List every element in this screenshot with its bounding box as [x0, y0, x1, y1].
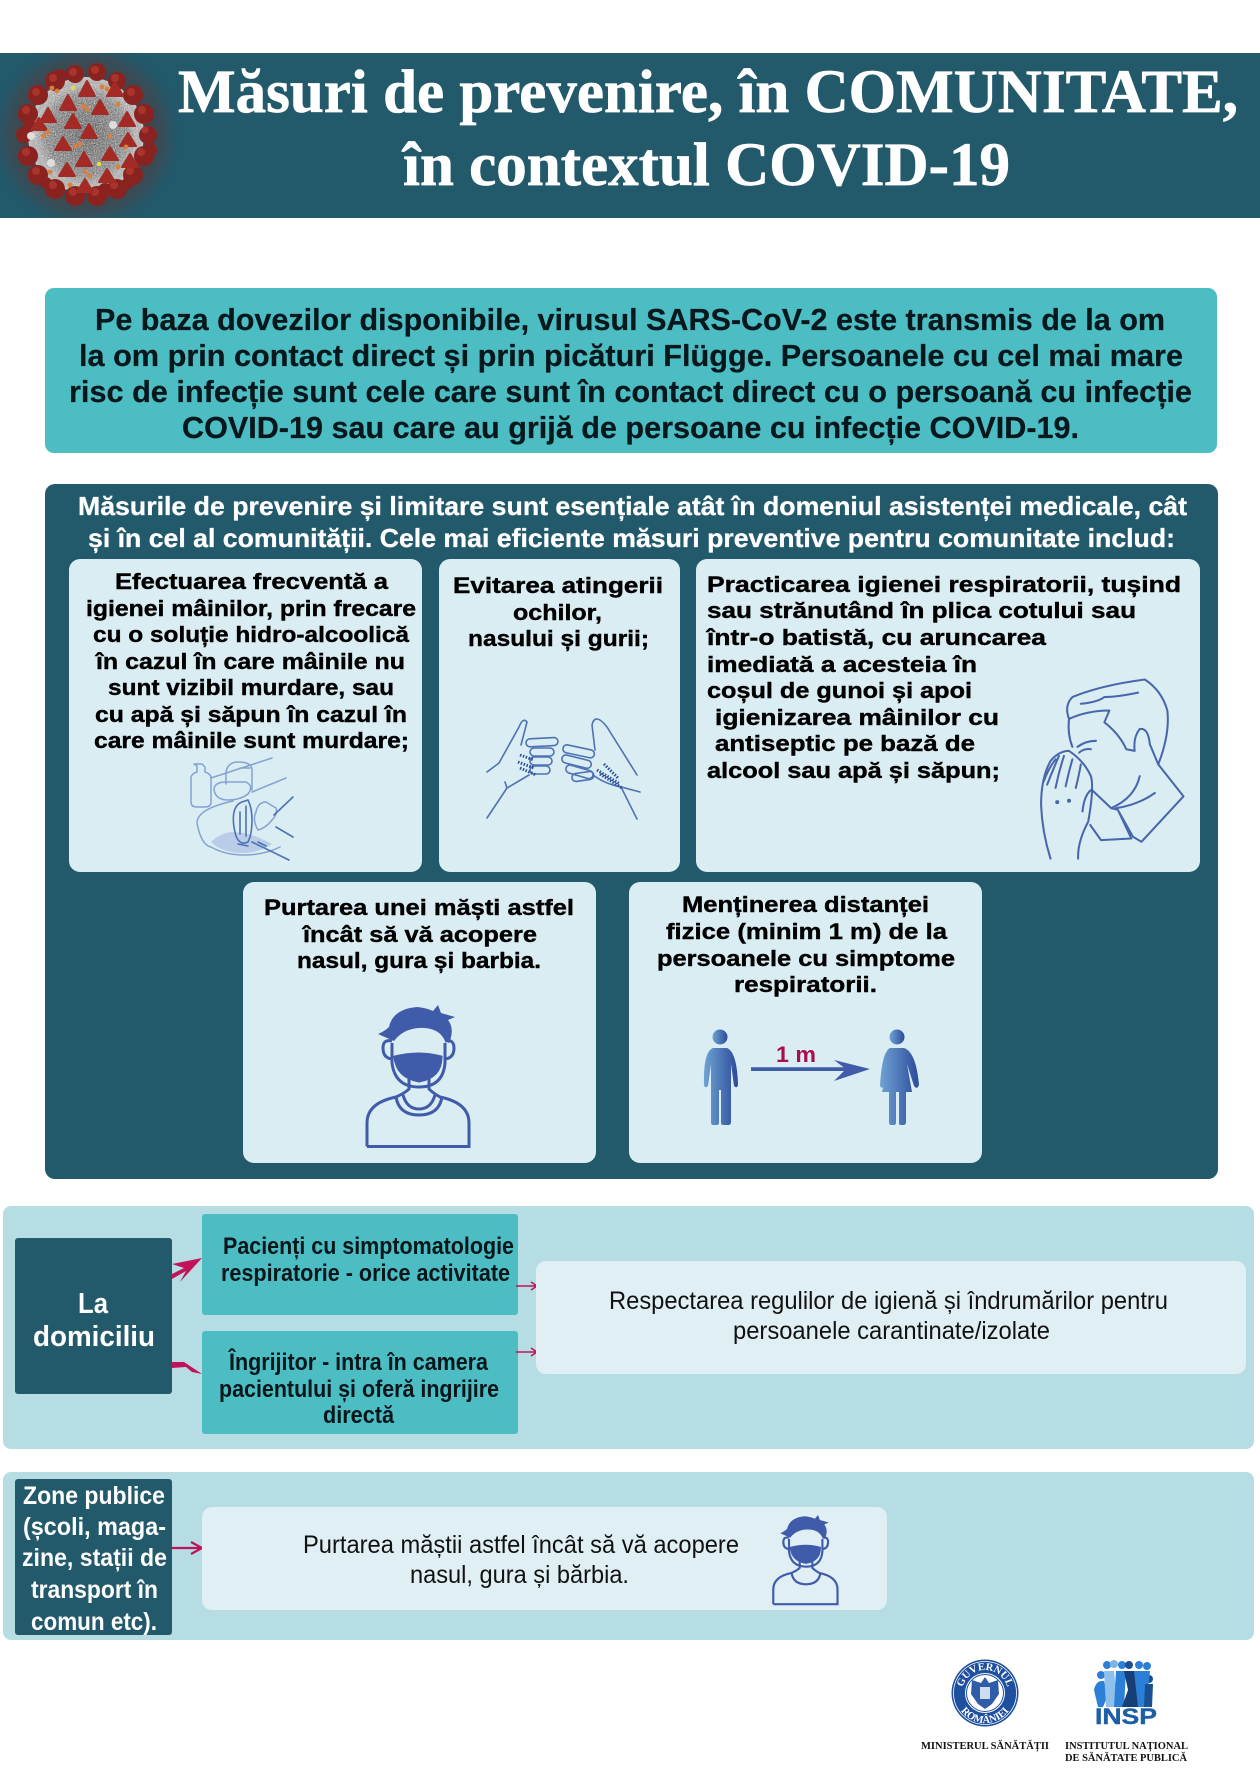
box: caregiver: pacientului și oferă ingrijire: [219, 1376, 499, 1403]
card: hand washing: sunt vizibil murdare, sau: [108, 675, 394, 700]
logo: INSP: INSP: [1095, 1704, 1157, 1729]
box: patients: [202, 1214, 518, 1315]
box: rules: persoanele carantinate/izolate: [733, 1317, 1050, 1345]
box: caregiver: [202, 1331, 518, 1434]
icon: coronavirus: [0, 53, 172, 218]
card: hand washing: Efectuarea frecventă a: [115, 569, 389, 594]
icon: dirty hands: [487, 719, 640, 819]
box: mask rule: Purtarea măștii astfel încât să vă acopere: [303, 1531, 739, 1559]
card: face mask: încât să vă acopere: [302, 922, 537, 947]
card: respiratory hygiene: igienizarea mâinilor cu: [715, 705, 999, 730]
logo: INSP: [1065, 1660, 1188, 1764]
logo: INSP: DE SĂNĂTATE PUBLICĂ: [1065, 1752, 1187, 1764]
box: patients: respiratorie - orice activitate: [221, 1260, 510, 1287]
arrow: caregiver to rules: [516, 1348, 537, 1356]
box: caregiver: directă: [323, 1402, 395, 1429]
card: face mask: Purtarea unei măști astfel: [264, 895, 574, 920]
panel heading: Măsurile de prevenire și limitare sunt esențiale atât în domeniul asistenței medicale, cât: [78, 491, 1187, 521]
panel heading: [78, 491, 1187, 553]
box: patients: Pacienți cu simptomatologie: [223, 1233, 514, 1260]
card: hand washing: cu apă și săpun în cazul în: [95, 702, 407, 727]
label: at home: [15, 1238, 172, 1394]
card: respiratory hygiene: alcool sau apă și săpun;: [707, 758, 1000, 783]
label: public areas: comun etc).: [31, 1608, 157, 1636]
card: physical distance: respiratorii.: [734, 972, 877, 997]
arrow: to caregiver: [172, 1354, 202, 1374]
card: avoid touching face: nasului și gurii;: [468, 626, 649, 651]
card: respiratory hygiene: într-o batistă, cu aruncarea: [706, 625, 1047, 650]
box: mask rule: nasul, gura și bărbia.: [410, 1561, 629, 1589]
card: hand washing: igienei mâinilor, prin frecare: [86, 596, 416, 621]
icon: person with mask small: [773, 1515, 838, 1604]
card: hand washing: cu o soluție hidro-alcoolică: [93, 622, 410, 647]
panel: preventive measures: [45, 484, 1218, 1179]
panel: public areas: [3, 1472, 1254, 1640]
label: at home: La: [78, 1288, 109, 1320]
logo: Ministerul Sănătății: ROMÂNIEI: [960, 1706, 1009, 1724]
box: rules: [536, 1261, 1246, 1374]
panel: intro transmission text: risc de infecție sunt cele care sunt în contact direct cu o persoană cu infecție: [69, 374, 1192, 409]
logo: Ministerul Sănătății: MINISTERUL SĂNĂTĂȚII: [921, 1740, 1049, 1752]
card: respiratory hygiene: sau strănutând în plica cotului sau: [707, 598, 1136, 623]
card: respiratory hygiene: coșul de gunoi și apoi: [707, 678, 972, 703]
box: caregiver: Îngrijitor - intra în camera: [228, 1348, 489, 1376]
card: face mask: [243, 882, 596, 1163]
arrow: one metre: [751, 1042, 870, 1081]
card: hand washing: care mâinile sunt murdare;: [94, 728, 409, 753]
label: public areas: [15, 1479, 172, 1636]
card: hand washing: [69, 559, 422, 872]
logo: INSP: INSTITUTUL NAȚIONAL: [1065, 1741, 1188, 1752]
label: public areas: transport în: [31, 1576, 158, 1604]
logo: Ministerul Sănătății: [921, 1660, 1049, 1752]
icon: washing hands at sink: [191, 758, 293, 860]
panel: intro transmission text: COVID-19 sau care au grijă de persoane cu infecție COVID-19.: [182, 410, 1079, 445]
arrow: patients to rules: [516, 1282, 537, 1290]
card: avoid touching face: ochilor,: [513, 600, 602, 625]
label: at home: domiciliu: [33, 1321, 155, 1353]
panel: intro transmission text: Pe baza dovezilor disponibile, virusul SARS-CoV-2 este transmis de la om: [95, 302, 1165, 337]
box: rules: Respectarea regulilor de igienă și îndrumărilor pentru: [609, 1287, 1168, 1315]
card: face mask: nasul, gura și barbia.: [297, 948, 541, 973]
icon: man: [704, 1030, 738, 1125]
card: hand washing: în cazul în care mâinile nu: [95, 649, 405, 674]
panel: at home: [3, 1206, 1254, 1449]
label: public areas: (școli, maga-: [23, 1513, 166, 1541]
title: Măsuri de prevenire, în COMUNITATE,: [178, 59, 1238, 126]
card: physical distance: persoanele cu simptome: [657, 946, 955, 971]
icon: sneezing into hands: [1041, 680, 1184, 859]
card: respiratory hygiene: Practicarea igienei respiratorii, tușind: [707, 572, 1181, 597]
panel: intro transmission text: la om prin contact direct și prin picături Flügge. Persoanele cu cel mai mare: [79, 338, 1183, 373]
icon: person with mask: [367, 1005, 469, 1146]
logo: Ministerul Sănătății: GUVERNUL: [957, 1663, 1012, 1686]
arrow: to patients: [172, 1258, 202, 1282]
card: respiratory hygiene: imediată a acesteia în: [707, 652, 977, 677]
panel heading: și în cel al comunității. Cele mai eficiente măsuri preventive pentru comunitate includ:: [88, 523, 1175, 553]
arrow: one metre: 1 m: [776, 1042, 816, 1067]
card: respiratory hygiene: [696, 559, 1200, 872]
arrow: to mask rule: [172, 1542, 202, 1554]
card: physical distance: Menținerea distanței: [682, 892, 929, 917]
icon: woman: [880, 1030, 919, 1125]
card: avoid touching face: Evitarea atingerii: [453, 573, 663, 598]
card: respiratory hygiene: antiseptic pe bază de: [715, 731, 975, 756]
title: în contextul COVID-19: [401, 132, 1010, 199]
label: public areas: zine, stații de: [22, 1544, 167, 1572]
label: public areas: Zone publice: [23, 1482, 165, 1510]
card: avoid touching face: [439, 559, 680, 872]
box: mask rule: [202, 1507, 887, 1610]
header band: [0, 53, 1260, 218]
card: physical distance: [629, 882, 982, 1163]
title: [178, 59, 1238, 199]
card: physical distance: fizice (minim 1 m) de la: [666, 919, 948, 944]
panel: intro transmission text: [45, 288, 1217, 453]
